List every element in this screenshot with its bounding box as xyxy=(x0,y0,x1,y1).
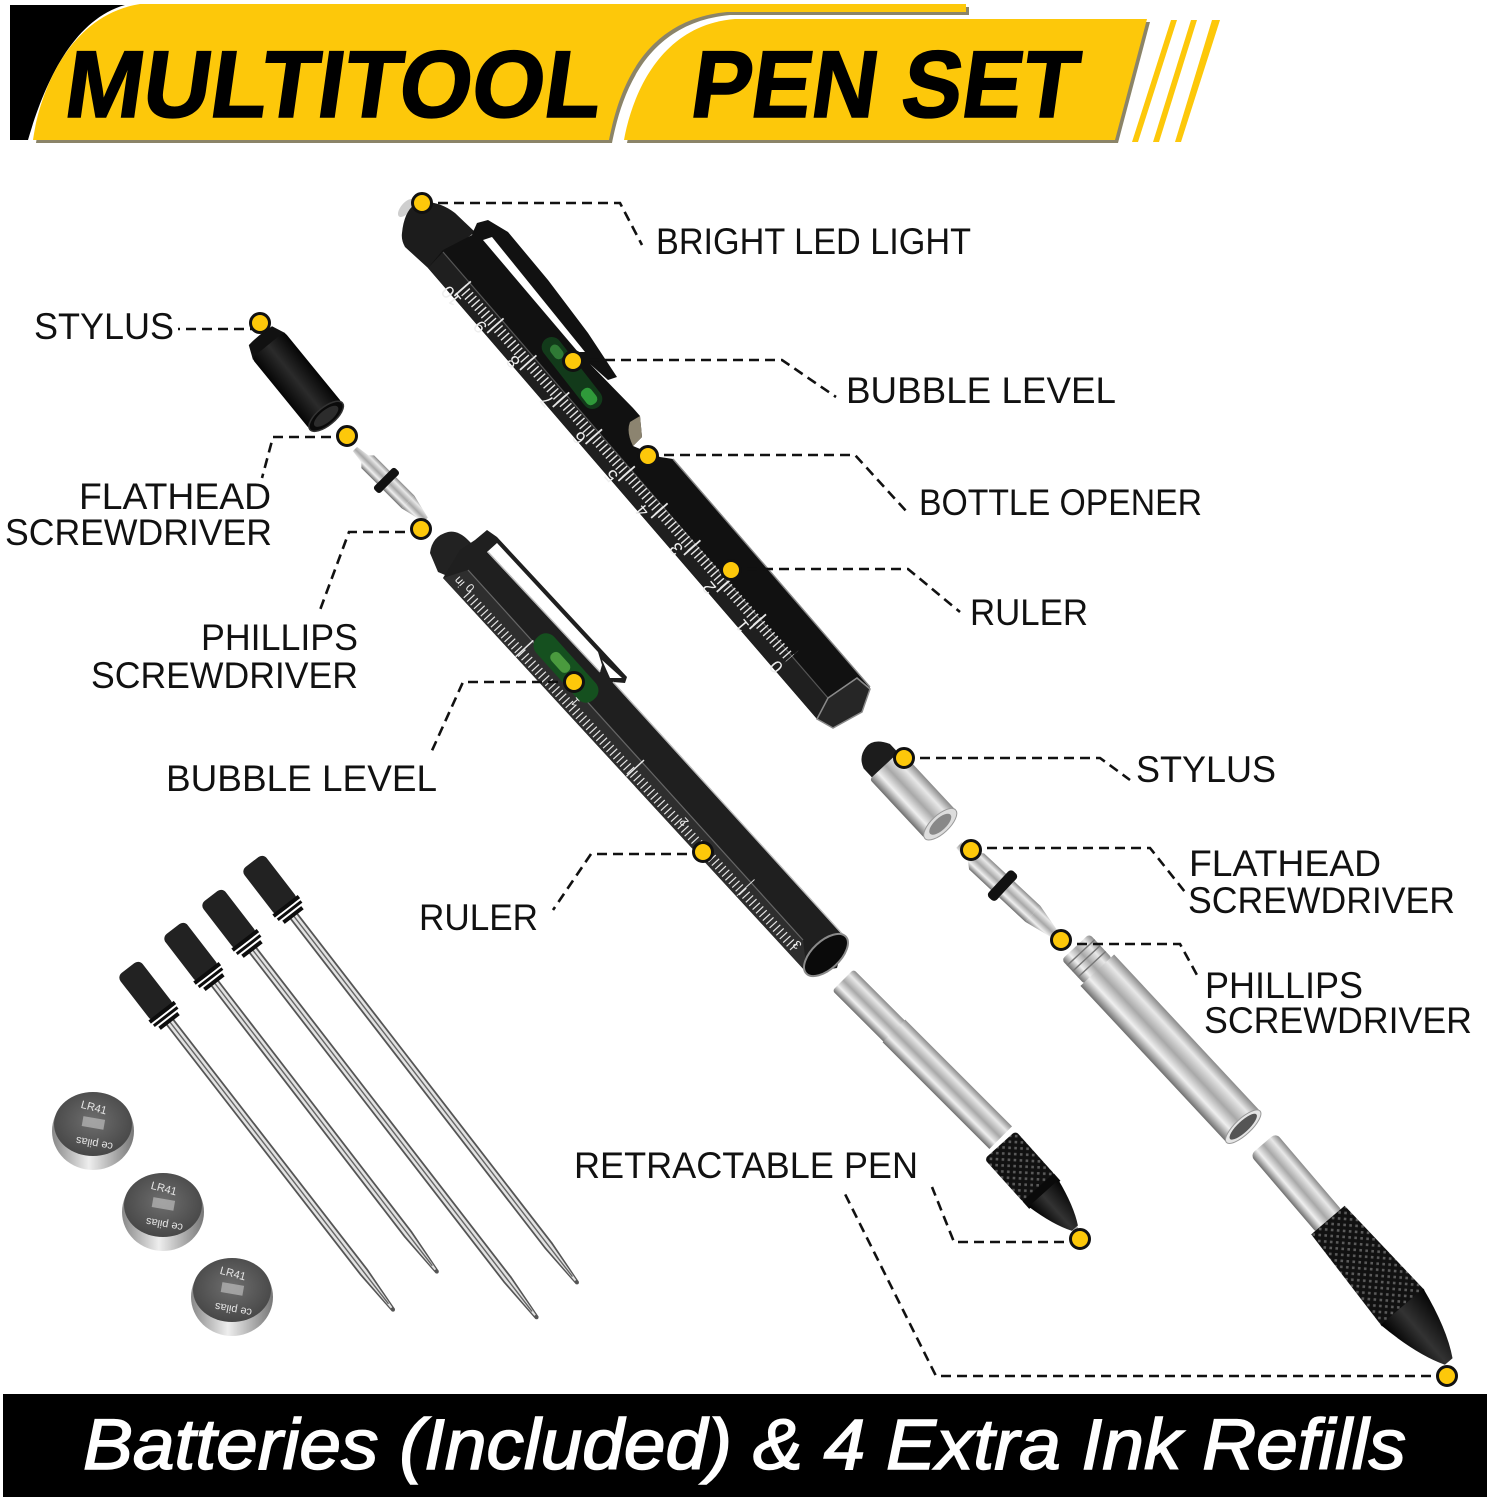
battery 1: LR41 xyxy=(80,1099,108,1117)
header banner xyxy=(10,4,1220,143)
label: flathead screwdriver right: FLATHEAD xyxy=(1189,843,1381,884)
pen tube left xyxy=(832,969,1012,1149)
label: flathead screwdriver left: SCREWDRIVER xyxy=(5,512,272,553)
ruler numbers xyxy=(437,282,787,677)
small pen numbers: 0 xyxy=(463,580,478,595)
small pen numbers xyxy=(451,574,805,952)
ruler numbers: 6 xyxy=(568,428,590,448)
small pen numbers: in xyxy=(451,574,467,590)
label: bright led light: BRIGHT LED LIGHT xyxy=(656,221,971,262)
label: ruler: RULER xyxy=(970,592,1088,633)
battery 2 xyxy=(122,1173,204,1251)
small pen ticks xyxy=(467,594,795,948)
ruler numbers: 9 xyxy=(469,317,491,337)
screwdriver bit right xyxy=(947,832,1069,949)
screwdriver bit left xyxy=(344,438,436,530)
ruler numbers: 8 xyxy=(502,352,524,372)
small pen vial xyxy=(529,629,603,707)
ruler numbers: 10 xyxy=(437,282,465,310)
banner stripes xyxy=(1132,20,1220,142)
retractable tip large xyxy=(1242,1126,1470,1380)
small pen body xyxy=(430,530,855,984)
small pen numbers: 1 xyxy=(568,694,583,709)
ruler numbers: 4 xyxy=(631,501,653,521)
title: pen set: PEN SET xyxy=(685,32,1086,138)
label: phillips screwdriver left: SCREWDRIVER xyxy=(91,655,358,696)
refill 1 xyxy=(115,958,407,1321)
label: stylus left: STYLUS xyxy=(34,306,174,347)
battery 2: LR41 xyxy=(150,1180,178,1198)
footer text: Batteries (Included) & 4 Extra Ink Refills xyxy=(83,1406,1406,1485)
battery 3: LR41 xyxy=(219,1265,247,1283)
title: multitool: MULTITOOL xyxy=(59,32,610,138)
retractable tip small xyxy=(984,1131,1096,1248)
ruler numbers: 2 xyxy=(698,578,720,598)
label: bubble level: BUBBLE LEVEL xyxy=(846,370,1116,411)
small pen numbers: 2 xyxy=(677,814,692,829)
label: phillips screwdriver right: PHILLIPS xyxy=(1205,965,1363,1006)
label: stylus right: STYLUS xyxy=(1136,749,1276,790)
small pen end xyxy=(797,926,855,984)
battery 2: ce pilas xyxy=(145,1215,184,1233)
battery 3 xyxy=(191,1258,273,1336)
label: phillips screwdriver left: PHILLIPS xyxy=(201,617,358,658)
label: flathead screwdriver right xyxy=(1188,843,1455,921)
refill 2 xyxy=(160,919,451,1283)
label: bottle opener: BOTTLE OPENER xyxy=(919,482,1202,523)
small pen numbers: 3 xyxy=(790,937,805,952)
refill 3 xyxy=(198,886,551,1329)
label: flathead screwdriver left xyxy=(5,476,272,553)
hex end xyxy=(817,678,870,728)
label: bubble level left: BUBBLE LEVEL xyxy=(166,758,437,799)
battery 3: ce pilas xyxy=(214,1300,253,1318)
ruler numbers: 7 xyxy=(536,391,558,411)
label: flathead screwdriver right: SCREWDRIVER xyxy=(1188,880,1455,921)
battery 1: ce pilas xyxy=(75,1134,114,1152)
leader lines xyxy=(178,203,1447,1376)
bubble vial xyxy=(538,333,606,413)
pen tube right xyxy=(1059,931,1266,1148)
marker dots xyxy=(250,194,1456,1386)
ruler ticks xyxy=(462,288,790,658)
label: retractable pen: RETRACTABLE PEN xyxy=(574,1145,918,1186)
stylus silver xyxy=(852,732,962,845)
label: phillips screwdriver right: SCREWDRIVER xyxy=(1204,1000,1472,1041)
refill 4 xyxy=(239,852,591,1294)
large pen body xyxy=(395,196,870,728)
label: flathead screwdriver left: FLATHEAD xyxy=(79,476,271,517)
ruler numbers: 3 xyxy=(665,539,687,559)
label: phillips screwdriver left xyxy=(91,617,358,696)
footer banner xyxy=(3,1394,1487,1497)
stylus cap black xyxy=(244,322,348,437)
label: phillips screwdriver right xyxy=(1204,965,1472,1041)
battery 1 xyxy=(52,1092,134,1170)
ruler numbers: 0 xyxy=(765,657,787,677)
ruler numbers: 1 xyxy=(731,616,753,636)
ruler numbers: 5 xyxy=(600,466,622,486)
label: ruler left: RULER xyxy=(419,897,538,938)
